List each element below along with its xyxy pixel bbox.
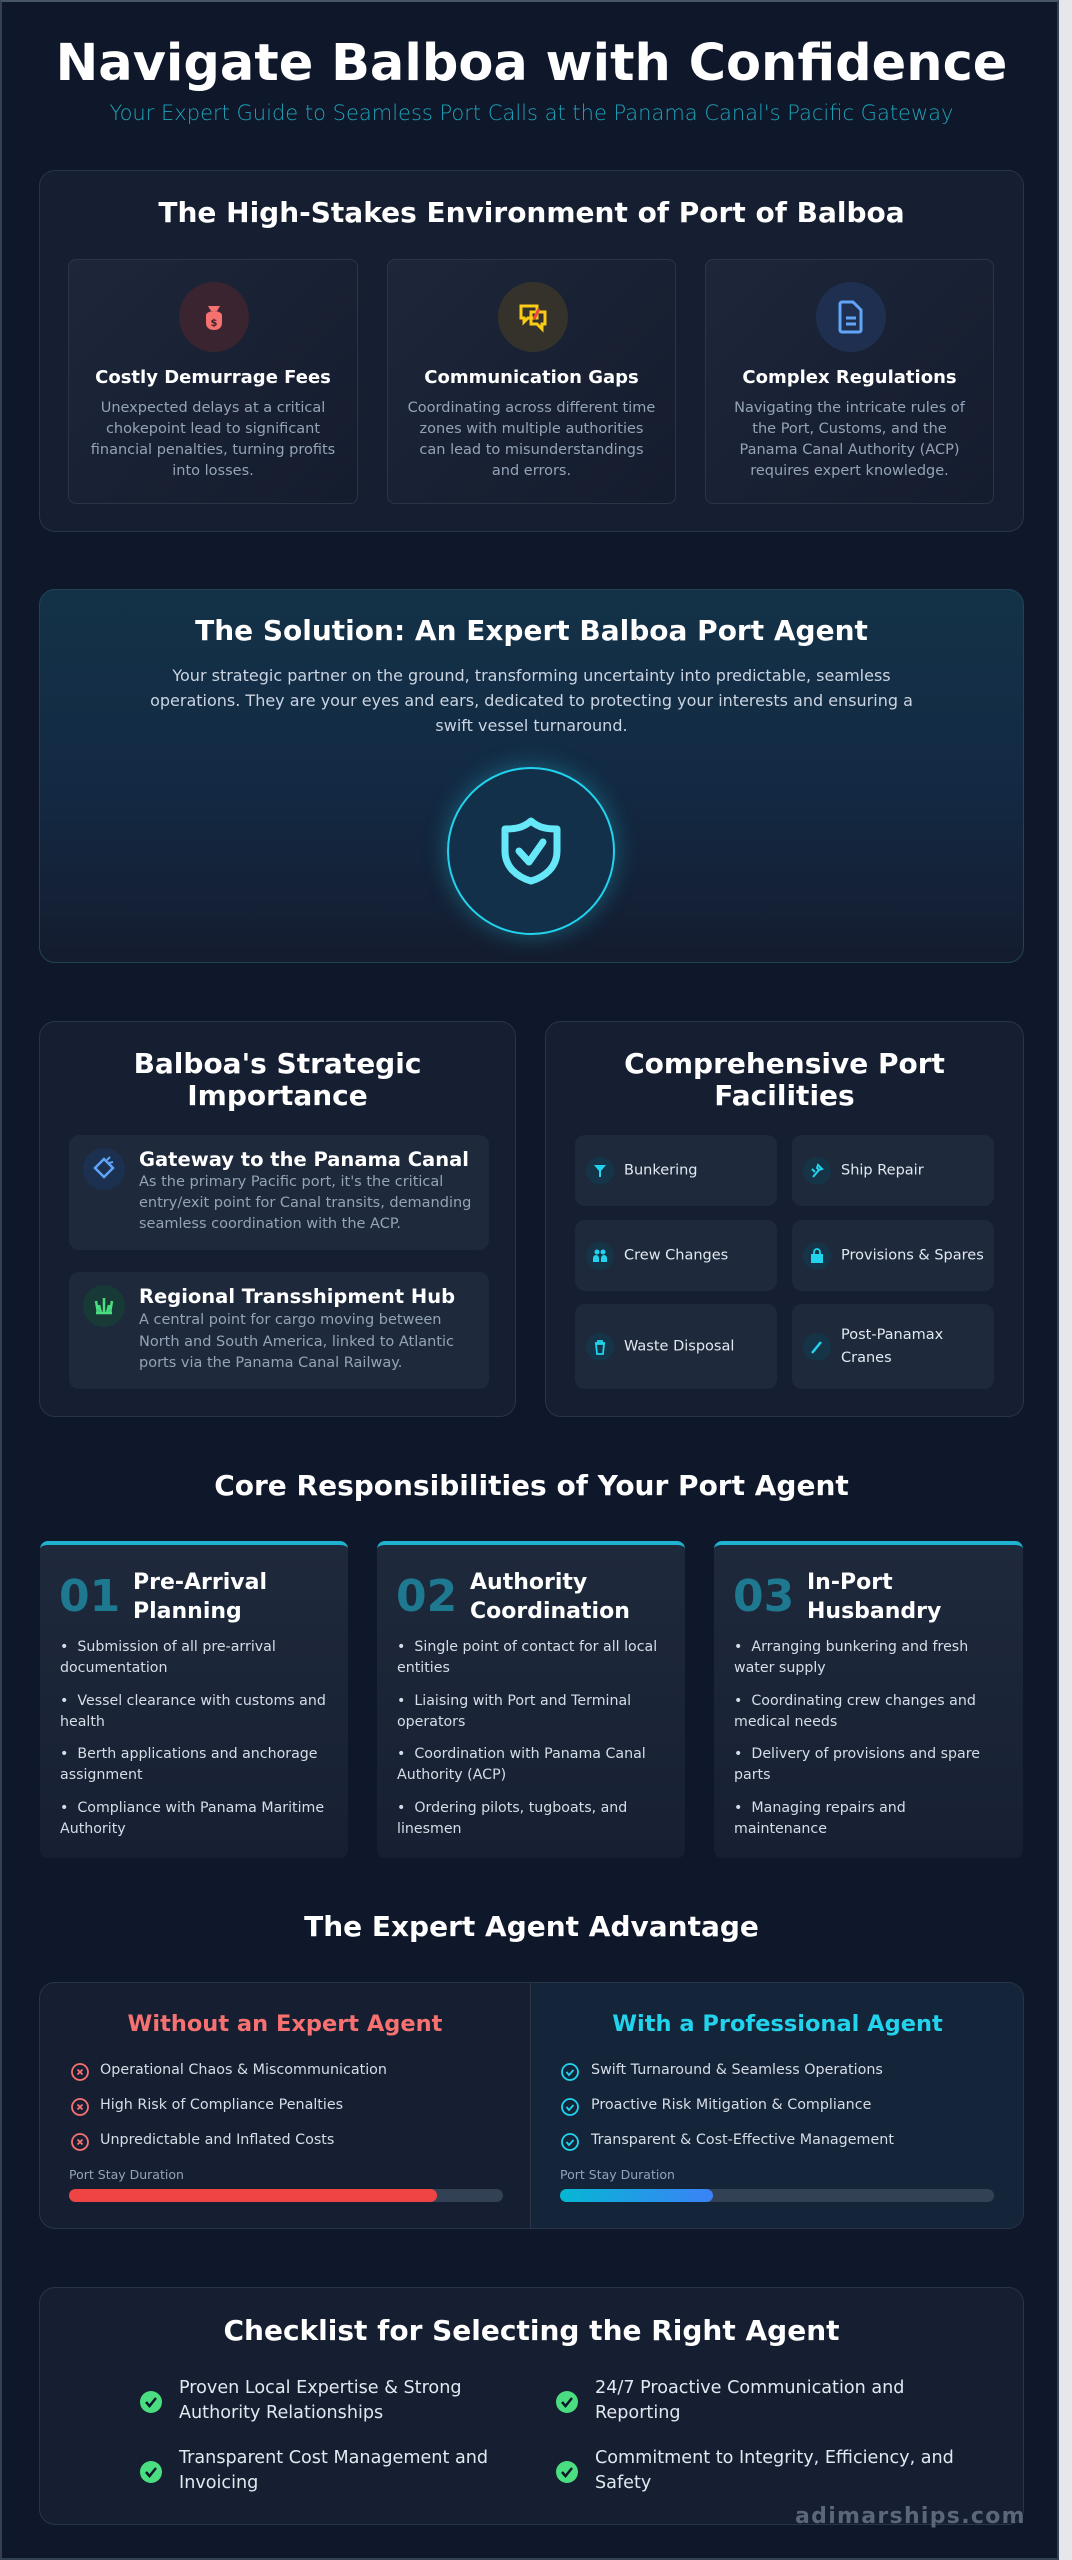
list: coordination tasks: operators — [397, 1714, 465, 1730]
list: husbandry tasks: • Arranging bunkering and fresh — [734, 1639, 968, 1655]
list: husbandry tasks: maintenance — [734, 1821, 827, 1837]
panel: comparison — [39, 1982, 1024, 2229]
list: husbandry tasks: • Coordinating crew changes and — [734, 1693, 976, 1709]
list: pre-arrival tasks: • Compliance with Panama Maritime — [60, 1800, 324, 1816]
panel: checklist — [39, 2287, 1024, 2525]
watermark: adimarships.com — [795, 2504, 1026, 2529]
list: pre-arrival tasks: • Berth applications and anchorage — [60, 1746, 318, 1762]
list: negatives: Operational Chaos & Miscommunication — [100, 2062, 387, 2078]
heading: without agent: Without an Expert Agent — [128, 2011, 442, 2037]
list: negatives: Port Stay Duration — [69, 2167, 184, 2182]
list: coordination tasks: linesmen — [397, 1821, 462, 1837]
icon: gateway — [83, 1148, 125, 1190]
checklist items: Transparent Cost Management and — [179, 2448, 488, 2468]
card: 01 pre-arrival: Planning — [133, 1599, 242, 1624]
item: gateway — [69, 1135, 489, 1250]
list: husbandry tasks: medical needs — [734, 1714, 837, 1730]
facility: waste disposal — [575, 1304, 777, 1389]
list: coordination tasks: Authority (ACP) — [397, 1767, 506, 1783]
card: 03 in-port husbandry: Husbandry — [807, 1599, 941, 1624]
item: transshipment: ports via the Panama Canal Railway. — [139, 1355, 402, 1371]
facility: ship repair: Ship Repair — [841, 1162, 924, 1178]
item: gateway: As the primary Pacific port, it's the critical — [139, 1174, 443, 1190]
panel: high-stakes environment — [39, 170, 1024, 532]
card: demurrage: Unexpected delays at a critical chokepoint lead to significant financial penalties, turning profits into losses. — [91, 400, 335, 479]
text: solution description: Your strategic partner on the ground, transforming uncertainty into predictable, seamless operations. They are your eyes and ears, dedicated to protecting your interests and ensuring a swift vessel turnaround. — [150, 666, 913, 735]
icon: shield — [447, 767, 615, 935]
card: regulations — [705, 259, 994, 504]
title: Navigate Balboa with Confidence — [56, 34, 1007, 93]
checklist items: 24/7 Proactive Communication and — [595, 2378, 904, 2398]
list: coordination tasks: • Coordination with Panama Canal — [397, 1746, 646, 1762]
card: communication — [387, 259, 676, 504]
card: communication: Communication Gaps — [424, 367, 639, 388]
list: husbandry tasks: • Managing repairs and — [734, 1800, 906, 1816]
card: 03 in-port husbandry: In-Port — [807, 1570, 893, 1595]
card: demurrage — [68, 259, 358, 504]
icon: money: $ — [211, 318, 218, 329]
list: pre-arrival tasks — [60, 1639, 326, 1837]
heading: core responsibilities: Core Responsibilities of Your Port Agent — [214, 1469, 849, 1502]
item: gateway: entry/exit point for Canal transits, demanding — [139, 1195, 471, 1211]
checklist items — [140, 2378, 954, 2493]
heading: solution: The Solution: An Expert Balboa Port Agent — [195, 614, 868, 647]
right half background — [530, 1983, 1023, 2228]
facility: crew changes — [575, 1220, 777, 1291]
list: coordination tasks — [397, 1639, 657, 1837]
card: 01 pre-arrival: Pre-Arrival — [133, 1570, 267, 1595]
heading: facilities: Comprehensive Port — [624, 1047, 945, 1080]
list: husbandry tasks — [734, 1639, 980, 1837]
facility: provisions — [792, 1220, 994, 1291]
checklist items: Invoicing — [179, 2473, 258, 2493]
icon: money — [179, 282, 249, 352]
item: transshipment: North and South America, linked to Atlantic — [139, 1334, 454, 1350]
facility: bunkering: Bunkering — [624, 1162, 698, 1178]
list: pre-arrival tasks: • Submission of all pre-arrival — [60, 1639, 276, 1655]
card: 02 authority coordination: Authority — [470, 1570, 587, 1595]
list: pre-arrival tasks: • Vessel clearance with customs and — [60, 1693, 326, 1709]
list: positives — [560, 2062, 994, 2202]
heading: strategic: Balboa's Strategic — [134, 1047, 421, 1080]
list: positives: Proactive Risk Mitigation & Compliance — [591, 2097, 871, 2113]
facility: crew changes: Crew Changes — [624, 1247, 728, 1263]
list: coordination tasks: • Ordering pilots, tugboats, and — [397, 1800, 627, 1816]
facility: waste disposal: Waste Disposal — [624, 1338, 734, 1354]
facility: ship repair — [792, 1135, 994, 1206]
facility: provisions: Provisions & Spares — [841, 1247, 984, 1263]
facility: cranes — [792, 1304, 994, 1389]
heading: facilities — [624, 1047, 945, 1112]
list: positives: Swift Turnaround & Seamless Operations — [591, 2062, 883, 2078]
list: pre-arrival tasks: health — [60, 1714, 105, 1730]
card: regulations: Navigating the intricate rules of the Port, Customs, and the Panama Canal Authority (ACP) requires expert knowledge. — [734, 400, 965, 479]
checklist items: Proven Local Expertise & Strong — [179, 2378, 462, 2398]
icon: hub — [83, 1285, 125, 1327]
facility: cranes: Post-Panamax — [841, 1326, 943, 1342]
list: coordination tasks: • Single point of contact for all local — [397, 1639, 657, 1655]
card: regulations: Complex Regulations — [742, 367, 957, 388]
card: 03 in-port husbandry — [714, 1541, 1023, 1858]
list: coordination tasks: • Liaising with Port and Terminal — [397, 1693, 631, 1709]
card: 01 pre-arrival: 01 — [59, 1571, 120, 1622]
icon: document — [816, 282, 886, 352]
item: gateway: seamless coordination with the ACP. — [139, 1216, 401, 1232]
list: coordination tasks: entities — [397, 1660, 450, 1676]
list: negatives: High Risk of Compliance Penalties — [100, 2097, 343, 2113]
heading: strategic: Importance — [187, 1079, 368, 1112]
heading: checklist: Checklist for Selecting the Right Agent — [223, 2314, 840, 2347]
list: positives: Port Stay Duration — [560, 2167, 675, 2182]
bar: long port stay — [69, 2189, 503, 2202]
card: communication: Coordinating across different time zones with multiple authorities can lead to misunderstandings and errors. — [408, 400, 655, 479]
list: husbandry tasks: water supply — [734, 1660, 826, 1676]
card: 03 in-port husbandry: 03 — [733, 1571, 794, 1622]
facility: cranes: Cranes — [841, 1350, 892, 1366]
card: 02 authority coordination: 02 — [396, 1571, 457, 1622]
list: pre-arrival tasks: Authority — [60, 1821, 126, 1837]
item: transshipment — [69, 1272, 489, 1389]
panel: strategic importance — [39, 1021, 516, 1417]
checklist items: Safety — [595, 2473, 651, 2493]
item: gateway: Gateway to the Panama Canal — [139, 1148, 469, 1171]
heading: expert agent advantage: The Expert Agent Advantage — [304, 1910, 759, 1943]
heading: with agent: With a Professional Agent — [612, 2011, 943, 2037]
list: pre-arrival tasks: documentation — [60, 1660, 167, 1676]
list: negatives — [69, 2062, 503, 2202]
heading: facilities: Facilities — [714, 1079, 855, 1112]
card: 02 authority coordination: Coordination — [470, 1599, 630, 1624]
card: demurrage: Costly Demurrage Fees — [95, 367, 331, 388]
icon: chat — [498, 282, 568, 352]
list: positives: Transparent & Cost-Effective Management — [591, 2132, 894, 2148]
facility: bunkering — [575, 1135, 777, 1206]
card: 02 authority coordination — [377, 1541, 685, 1858]
checklist items: Authority Relationships — [179, 2403, 383, 2423]
list: pre-arrival tasks: assignment — [60, 1767, 143, 1783]
list: husbandry tasks: parts — [734, 1767, 770, 1783]
panel: solution — [39, 589, 1024, 963]
panel: port facilities — [545, 1021, 1024, 1417]
checklist items: Commitment to Integrity, Efficiency, and — [595, 2448, 954, 2468]
item: transshipment: A central point for cargo moving between — [139, 1312, 441, 1328]
item: transshipment: Regional Transshipment Hub — [139, 1285, 455, 1308]
card: 01 pre-arrival — [40, 1541, 348, 1858]
heading: high-stakes: The High-Stakes Environment of Port of Balboa — [158, 196, 905, 229]
bar: short port stay — [560, 2189, 994, 2202]
heading: strategic — [134, 1047, 421, 1112]
list: negatives: Unpredictable and Inflated Costs — [100, 2132, 334, 2148]
list: husbandry tasks: • Delivery of provisions and spare — [734, 1746, 980, 1762]
subtitle: Your Expert Guide to Seamless Port Calls at the Panama Canal's Pacific Gateway — [110, 101, 953, 125]
checklist items: Reporting — [595, 2403, 681, 2423]
